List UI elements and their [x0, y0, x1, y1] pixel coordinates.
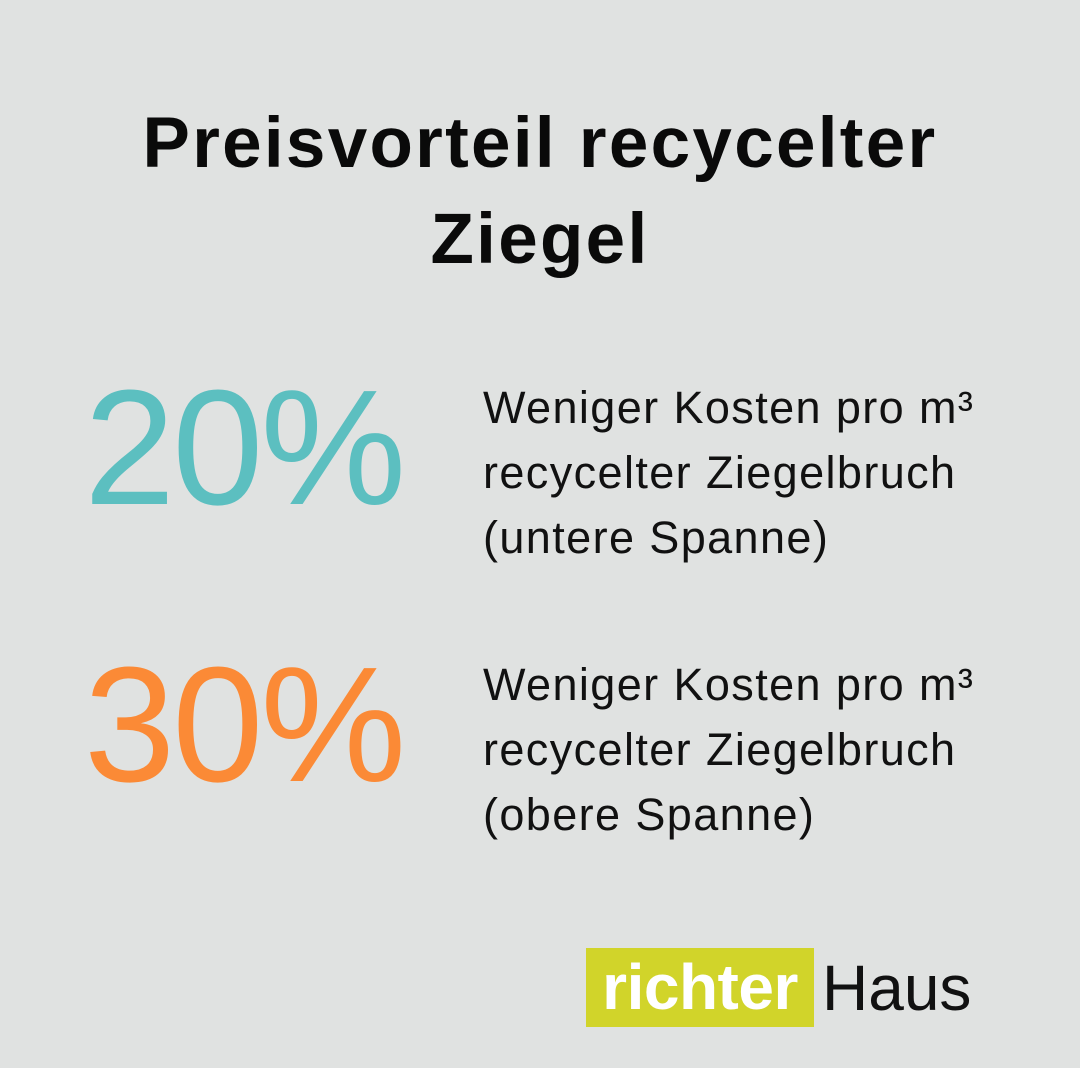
- description 20%: recycelter Ziegelbruch: [483, 447, 956, 498]
- logo box richter: richter: [602, 951, 798, 1023]
- description 20%: Weniger Kosten pro m³: [483, 382, 974, 433]
- title: Ziegel: [431, 200, 649, 279]
- description 20%: (untere Spanne): [483, 512, 829, 563]
- title: [143, 104, 937, 279]
- stat: 30%: [84, 633, 974, 840]
- description 30%: recycelter Ziegelbruch: [483, 724, 956, 775]
- description 30%: Weniger Kosten pro m³: [483, 659, 974, 710]
- description 30%: [483, 659, 974, 840]
- number 20%: 20%: [84, 356, 403, 539]
- description 30%: (obere Spanne): [483, 789, 815, 840]
- description 20%: [483, 382, 974, 563]
- logo: [586, 948, 971, 1027]
- title: Preisvorteil recycelter: [143, 104, 937, 183]
- number 30%: 30%: [84, 633, 403, 816]
- logo text Haus: Haus: [822, 952, 971, 1024]
- stat: 20%: [84, 356, 974, 563]
